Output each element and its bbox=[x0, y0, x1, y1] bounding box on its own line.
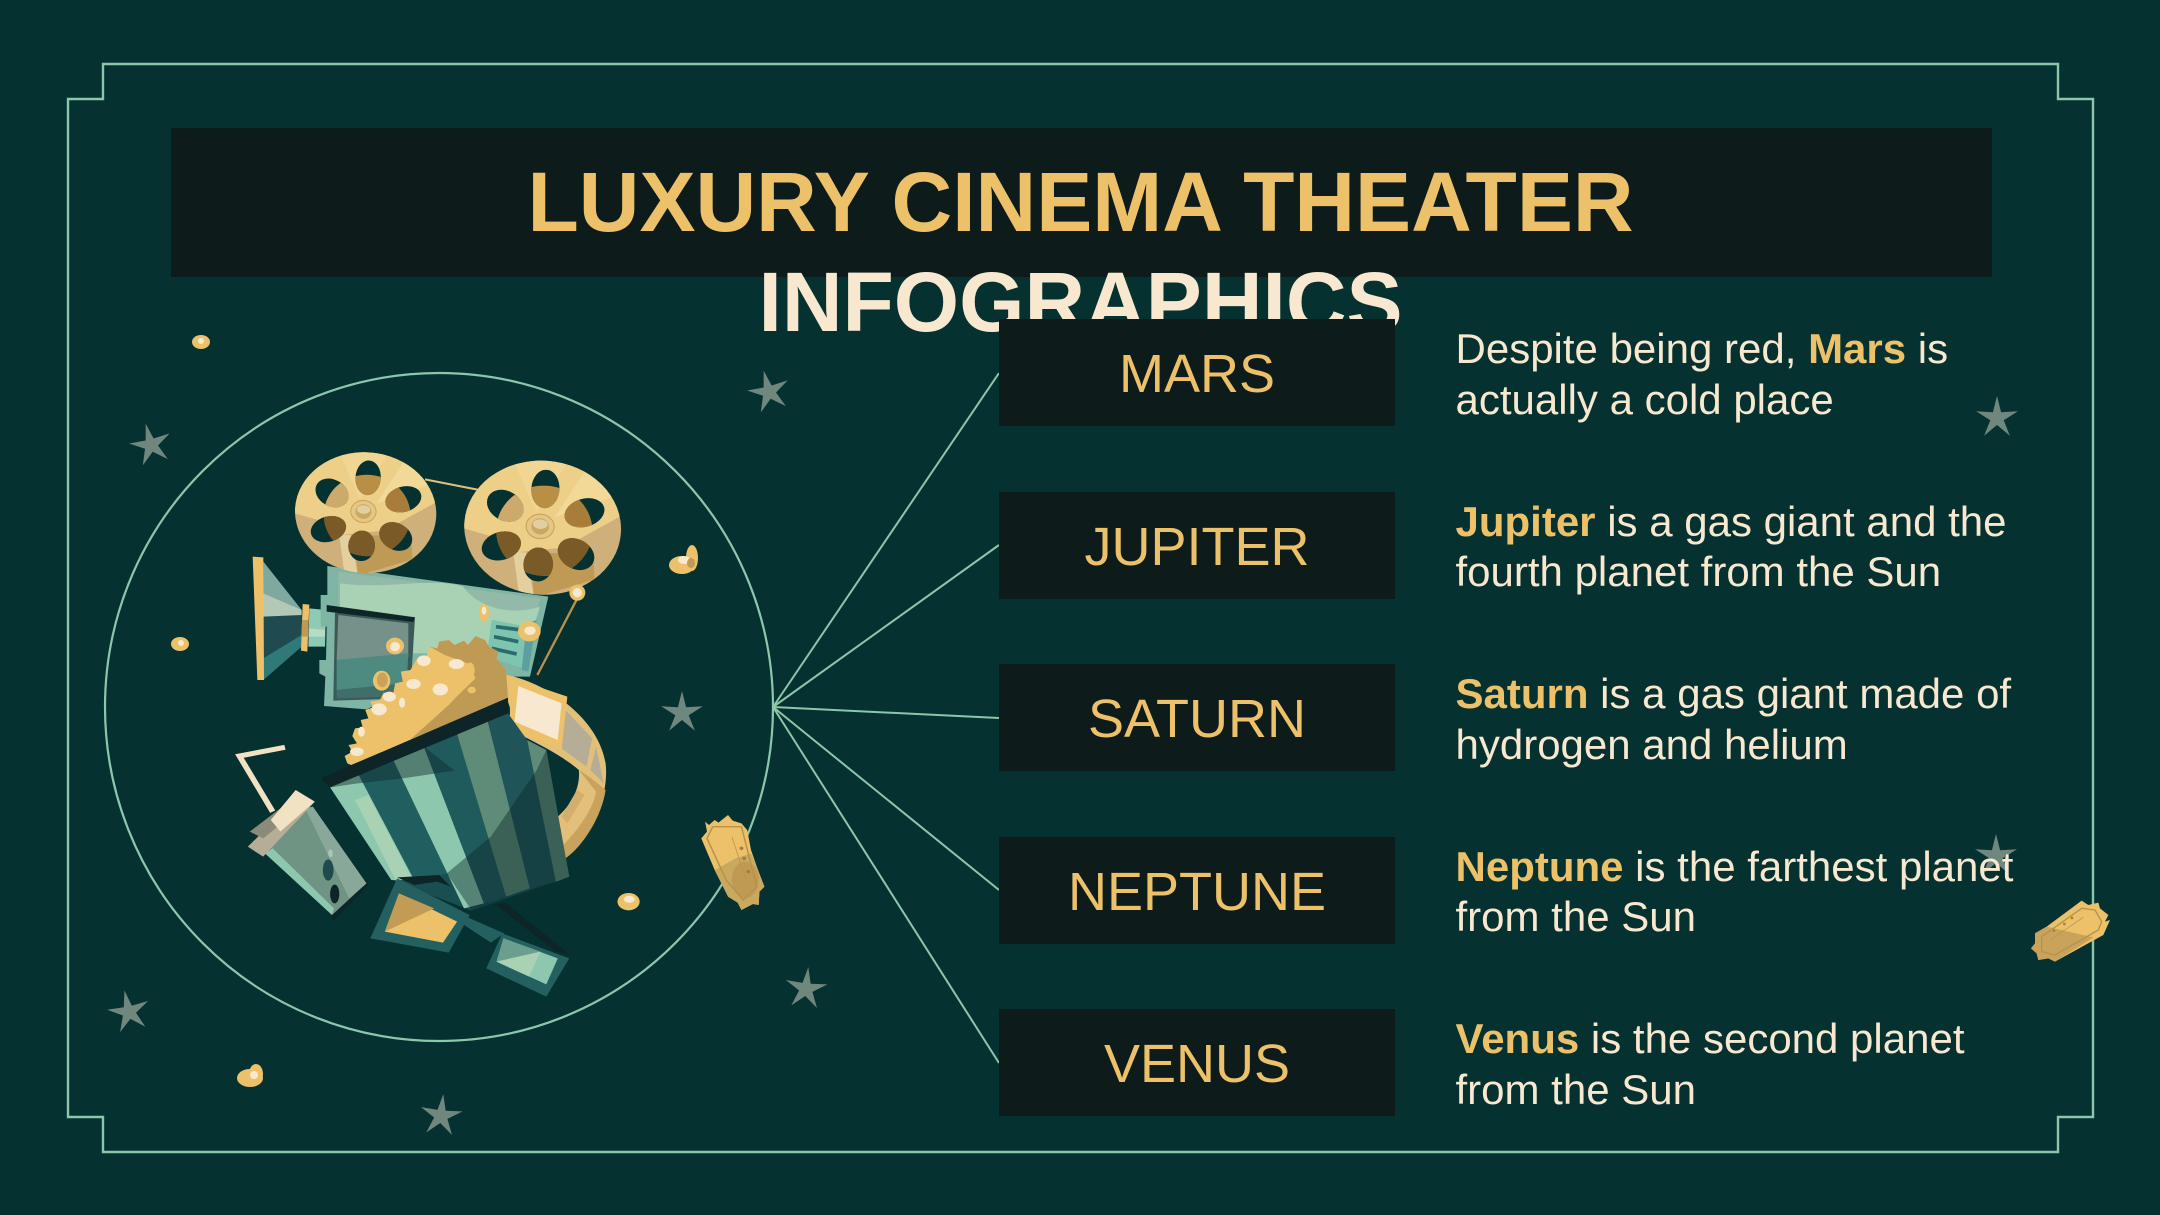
description: Saturn bbox=[1456, 670, 2012, 768]
ticket bbox=[701, 815, 764, 910]
label: Neptune bbox=[999, 836, 1395, 944]
description: Mars bbox=[1456, 325, 1948, 423]
description: Venus bbox=[1456, 1015, 1964, 1113]
description: Neptune bbox=[1456, 842, 2014, 940]
film reel left bbox=[288, 441, 443, 584]
popcorn tub, drink and glasses bbox=[239, 636, 764, 997]
label: Jupiter bbox=[999, 492, 1395, 598]
ticket on frame bbox=[2031, 901, 2110, 962]
label: Jupiter: JUPITER bbox=[1084, 516, 1310, 576]
description: Saturn: Saturn is a gas giant made of bbox=[1456, 670, 2011, 717]
title: INFOGRAPHICS bbox=[758, 255, 1403, 349]
description: Mars: actually a cold place bbox=[1456, 376, 1834, 423]
description: Neptune: Neptune is the farthest planet bbox=[1456, 842, 2013, 890]
support arm bbox=[537, 598, 577, 675]
label: Neptune: NEPTUNE bbox=[1068, 862, 1326, 922]
title banner bbox=[171, 128, 1992, 277]
description: Jupiter: fourth planet from the Sun bbox=[1456, 548, 1941, 595]
popcorn kernel bbox=[617, 893, 640, 910]
title: LUXURY CINEMA THEATER bbox=[527, 154, 1634, 248]
popcorn on projector bbox=[373, 585, 585, 691]
description: Saturn: hydrogen and helium bbox=[1456, 721, 1848, 768]
description: Mars: Despite being red, Mars is bbox=[1456, 325, 1948, 372]
circle outline bbox=[105, 373, 773, 1041]
drink cup bbox=[248, 790, 368, 922]
scattered popcorn bbox=[171, 335, 698, 1087]
label: Venus: VENUS bbox=[1104, 1034, 1290, 1094]
label: Venus bbox=[999, 1009, 1395, 1116]
label: Mars: MARS bbox=[1119, 344, 1275, 404]
label: Saturn bbox=[999, 664, 1395, 771]
title bbox=[527, 154, 1634, 349]
film reel right bbox=[456, 448, 629, 607]
drive belt bbox=[425, 479, 510, 496]
film projector bbox=[253, 441, 629, 709]
background stars bbox=[104, 366, 2018, 1136]
projector lens bbox=[253, 557, 326, 680]
illustration and connectors bbox=[104, 335, 2110, 1135]
description: Jupiter: Jupiter is a gas giant and the bbox=[1456, 498, 2006, 544]
drinking straw bbox=[239, 747, 285, 812]
3D glasses bbox=[370, 875, 569, 997]
description: Venus: Venus is the second planet bbox=[1456, 1015, 1964, 1062]
label: Mars bbox=[999, 319, 1395, 426]
label: Saturn: SATURN bbox=[1088, 689, 1306, 749]
description: Venus: from the Sun bbox=[1456, 1066, 1696, 1113]
tub rim and stripes bbox=[321, 698, 569, 911]
connector lines bbox=[773, 373, 999, 1063]
projector body bbox=[319, 566, 548, 709]
film strip bbox=[498, 673, 606, 858]
description: Neptune: from the Sun bbox=[1456, 893, 1696, 940]
description: Jupiter bbox=[1456, 498, 2006, 595]
popcorn mound bbox=[345, 636, 508, 765]
